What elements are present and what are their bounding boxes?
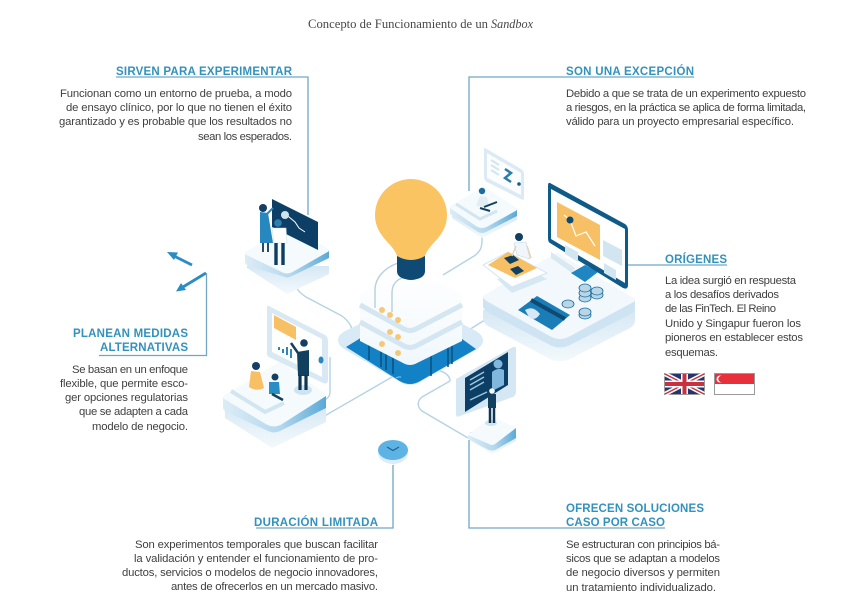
heading: SON UNA EXCEPCIÓN [566,65,694,78]
platform [483,255,635,362]
body text [59,88,292,143]
body text: Unido y Singapur fueron los [665,318,801,330]
body text: ger opciones regulatorias [65,392,188,404]
connector line [469,77,694,191]
body text [665,275,803,359]
body text: Se estructuran con principios bá- [566,539,720,551]
title: Sandbox [491,17,533,31]
platform [450,189,517,238]
bulb wires [375,263,413,312]
man [272,219,287,265]
title: Concepto de Funcionamiento de un [308,17,489,31]
person at desk [512,233,531,259]
indicator dots [379,307,401,356]
woman [259,204,273,252]
profile screen [456,347,516,417]
blue opening [346,326,476,384]
heading [73,328,188,354]
blackboard [272,199,318,250]
seated man [269,374,283,400]
base surround [338,305,483,385]
panel: ofrecen soluciones [469,440,720,594]
body text: flexible, que permite esco- [60,378,188,390]
body text: Funcionan como un entorno de prueba, a modo [60,88,292,100]
body text: modelo de negocio. [92,421,188,433]
platform [245,230,329,294]
heading: ORÍGENES [665,253,727,266]
panel: duración limitada [122,440,408,593]
panel: sirven para experimentar [59,66,308,215]
body text: Son experimentos temporales que buscan facilitar [135,539,378,551]
body text [60,364,189,433]
body text: a riesgos, en la práctica se aplica de forma limitada, [566,102,806,114]
panel: son una excepción [469,65,806,191]
body text: de ensayo clínico, por lo que no tienen el éxito [66,102,292,114]
connector line [469,440,665,528]
card [518,296,570,330]
body text: de las FinTech. El Reino [665,303,776,315]
person [485,388,497,426]
body text: sean los esperados. [198,131,292,143]
illustration: small platform with tablet [450,148,524,238]
bulb base [397,251,425,280]
panel: planean medidas alternativas [60,252,206,433]
heading: ALTERNATIVAS [100,342,188,354]
icon: UK flag [664,374,704,394]
body text: de negocio diversos y permiten [566,567,720,579]
platform [468,416,516,454]
connector line [99,273,206,356]
body text: esquemas. [665,347,718,359]
body text: ductos, servicios o modelos de negocio innovadores, [122,567,378,579]
heading: SIRVEN PARA EXPERIMENTAR [116,66,293,78]
illustration: platform with two people at blackboard [245,199,329,294]
tablet [484,148,524,200]
arrows [167,252,206,292]
illustration: central server and light bulb [338,179,483,385]
illustration: platform with person and profile screen [456,347,516,454]
body text [566,88,806,128]
monitor [548,183,628,289]
body text: válido para un proyecto empresarial específico. [566,116,794,128]
heading: PLANEAN MEDIDAS [73,328,188,340]
illustration: large platform with monitor [483,183,635,362]
body text: pioneros en establecer estos [665,332,803,344]
heading: CASO POR CASO [566,517,665,529]
panel: orígenes [628,253,803,394]
presentation screen [267,306,328,384]
heading: OFRECEN SOLUCIONES [566,503,704,515]
heading: DURACIÓN LIMITADA [254,516,378,529]
desk [483,252,547,293]
body text: la validación y entender el funcionamiento de pro- [134,553,378,565]
body text: Debido a que se trata de un experimento expuesto [566,88,806,100]
connector line [628,264,727,266]
presenter [291,339,312,395]
connector wires [293,230,488,438]
body text [566,539,720,594]
seated woman [249,362,264,390]
illustration: platform with presenter and audience [223,306,328,448]
body text: sicos que se adaptan a modelos [566,553,720,565]
body text: Se basan en un enfoque [72,364,188,376]
body text: antes de ofrecerlos en un mercado masivo. [171,581,378,593]
icon: Singapore flag [714,374,754,394]
connector line [116,77,308,215]
connector line [256,465,393,528]
coins [562,284,603,319]
server stack [360,268,462,365]
person [476,188,497,211]
body text [122,539,378,593]
body text: a los desafíos derivados [665,289,779,301]
icon: clock [378,440,408,464]
body text: garantizado y es probable que los resultados no [59,116,292,128]
platform [223,364,326,448]
body text: La idea surgió en respuesta [665,275,797,287]
body text: que se adapten a cada [79,406,189,418]
heading [566,503,704,529]
bulb glass [375,179,447,260]
body text: un tratamiento individualizado. [566,582,716,594]
